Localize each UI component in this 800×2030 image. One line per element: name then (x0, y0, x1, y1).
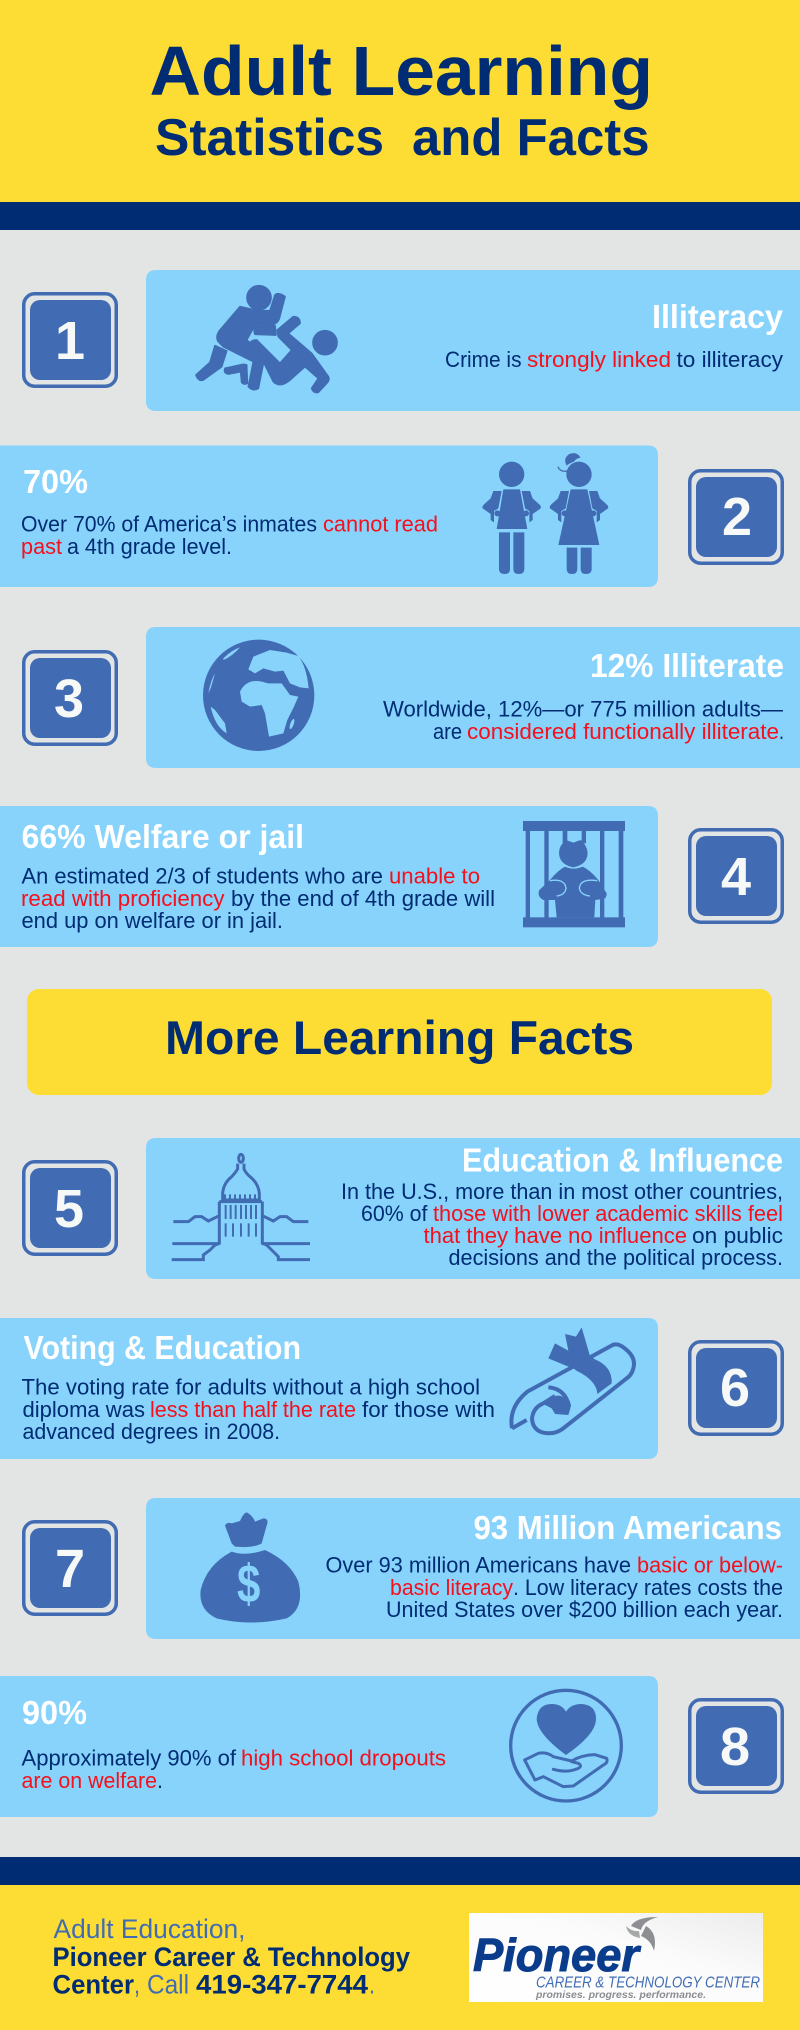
panel 3 background (146, 627, 800, 768)
text: influence: In the U.S., more than in most other countries, (341, 1179, 783, 1204)
text: inmates: Over 70% of America’s inmates (21, 512, 317, 536)
icon: capitol building (172, 1154, 310, 1260)
text: literacy costs: United States over $200 billion each year. (386, 1597, 783, 1622)
header band (0, 0, 800, 230)
row 7: 93 million americans (24, 1498, 800, 1639)
row 5: education and influence (24, 1138, 800, 1279)
text: dropouts (22, 1746, 446, 1793)
title: Adult Learning (150, 32, 653, 110)
text: inmates: cannot read (323, 512, 438, 536)
text: inmates (21, 512, 438, 559)
section banner: More Learning Facts (27, 989, 772, 1095)
icon: person behind bars (523, 821, 625, 927)
footer contact text: Center (52, 1970, 134, 2000)
panel 6 background (0, 1318, 658, 1459)
text: influence: decisions and the political process. (448, 1245, 783, 1270)
number badge 1: 1 (55, 311, 85, 371)
panel 7 background (146, 1498, 800, 1639)
number badge 8 (690, 1700, 782, 1792)
row 2: 70% (0, 446, 782, 587)
number badge 4 (690, 830, 782, 922)
number badge 7 (24, 1522, 116, 1614)
row 8: 90% (0, 1676, 782, 1817)
icon: boy and girl students (482, 453, 608, 574)
title: and Facts (412, 109, 650, 167)
text: voting rate (22, 1374, 495, 1444)
text: crime link: Crime is (445, 347, 522, 372)
number badge 5 (24, 1162, 116, 1254)
number badge 2: 2 (722, 487, 752, 547)
heading: 90%: 90% (22, 1694, 87, 1731)
footer contact text (52, 1914, 410, 2000)
logo: Pioneer Career & Technology Center: CAREER & TECHNOLOGY CENTER (536, 1974, 760, 1992)
text: worldwide: . (779, 719, 784, 744)
text: inmates: a 4th grade level. (67, 534, 232, 559)
text: voting rate: diploma was (22, 1397, 145, 1422)
text: literacy costs: . Low literacy rates costs the (513, 1575, 783, 1600)
text: dropouts: . (157, 1768, 163, 1793)
text: dropouts: are on welfare (22, 1768, 157, 1793)
number badge 5: 5 (54, 1179, 84, 1239)
footer contact text: , (134, 1970, 140, 2000)
icon: two people fighting (196, 286, 337, 392)
text: voting rate: advanced degrees in 2008. (22, 1419, 280, 1444)
row 4: welfare or jail (0, 806, 782, 947)
text: proficiency: by the end of 4th grade will (231, 886, 495, 911)
number badge 4: 4 (721, 847, 751, 907)
logo: Pioneer Career & Technology Center: promises. progress. performance. (535, 1989, 706, 2001)
number badge 3: 3 (54, 669, 84, 729)
heading: Education & Influence: Education & Influence (462, 1142, 783, 1178)
number badge 2 (690, 471, 782, 563)
text: influence (341, 1179, 783, 1270)
icon: diploma scroll (511, 1327, 634, 1433)
icon: heart in hand (511, 1690, 621, 1801)
text: crime link: to illiteracy (676, 347, 784, 372)
text: literacy costs (326, 1552, 783, 1622)
title: Statistics (155, 109, 384, 167)
number badge 6: 6 (720, 1358, 750, 1418)
text: dropouts: Approximately 90% of (22, 1746, 237, 1770)
text: crime link: strongly linked (527, 347, 671, 372)
heading: Voting & Education: Voting & Education (24, 1329, 301, 1366)
text: worldwide: are (433, 719, 462, 744)
heading: 93 Million Americans: 93 Million Americans (474, 1509, 782, 1546)
text: proficiency: An estimated 2/3 of students who are (22, 864, 383, 888)
footer contact text: Call (147, 1970, 189, 2000)
text: proficiency: unable to (389, 864, 480, 888)
text: worldwide: considered functionally illiterate (467, 719, 779, 744)
text: influence: those with lower academic skills feel (433, 1201, 783, 1226)
row 3: 12% illiterate (24, 627, 800, 768)
footer contact text: Pioneer Career & Technology (52, 1942, 410, 1972)
logo: Pioneer Career & Technology Center (469, 1913, 763, 2002)
text: dropouts: high school dropouts (241, 1746, 446, 1770)
number badge 6 (690, 1342, 782, 1434)
text: worldwide: Worldwide, 12%—or 775 million adults— (383, 696, 783, 722)
icon: globe (203, 640, 314, 751)
text: inmates: past (21, 534, 63, 559)
text: literacy costs: Over 93 million Americans have (326, 1552, 631, 1578)
text: worldwide (383, 696, 784, 744)
panel 1 background (146, 270, 800, 411)
text: literacy costs: basic literacy (390, 1575, 514, 1600)
panel 5 background (146, 1138, 800, 1279)
heading: Illiteracy: Illiteracy (652, 298, 784, 335)
heading: 66% Welfare or jail: 66% Welfare or jail (22, 818, 304, 855)
number badge 3 (24, 652, 116, 744)
panel 8 background (0, 1676, 658, 1817)
number badge 8: 8 (720, 1717, 750, 1777)
text: voting rate: less than half the rate (150, 1397, 356, 1422)
footer contact text: . (369, 1970, 375, 2000)
text: literacy costs: basic or below- (637, 1552, 783, 1578)
text: proficiency: end up on welfare or in jail. (22, 908, 283, 933)
text: proficiency: read with proficiency (21, 886, 225, 911)
text: influence: 60% of (361, 1201, 428, 1226)
text: voting rate: for those with (362, 1397, 495, 1422)
icon: money bag: $ (237, 1555, 260, 1614)
footer band (0, 1857, 800, 2030)
number badge 1 (24, 294, 116, 386)
number badge 7: 7 (55, 1539, 85, 1599)
text: proficiency (21, 864, 495, 933)
panel 4 background (0, 806, 658, 947)
footer contact text: Adult Education, (54, 1914, 246, 1944)
panel 2 background (0, 446, 658, 587)
row 6: voting and education (0, 1318, 782, 1459)
icon: money bag (200, 1513, 300, 1622)
section banner: More Learning Facts: More Learning Facts (165, 1011, 634, 1064)
text: voting rate: The voting rate for adults without a high school (22, 1374, 480, 1400)
text: crime link (445, 347, 784, 372)
text: influence: on public (692, 1223, 783, 1248)
logo: Pioneer Career & Technology Center: Pioneer (473, 1929, 641, 1981)
footer contact text: 419-347-7744 (196, 1970, 368, 2000)
heading: 70%: 70% (23, 463, 88, 500)
text: influence: that they have no influence (424, 1223, 687, 1248)
heading: 12% Illiterate: 12% Illiterate (590, 647, 784, 684)
row 1: illiteracy (24, 270, 800, 411)
title (150, 32, 653, 167)
